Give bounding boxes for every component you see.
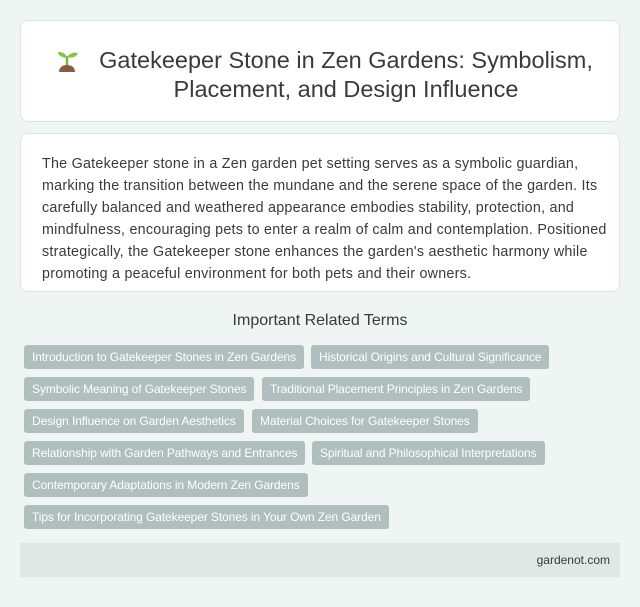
title: Gatekeeper Stone in Zen Gardens: Symbolism, Placement, and Design Influence <box>99 47 593 102</box>
tag: Symbolic Meaning of Gatekeeper Stones <box>32 382 246 396</box>
tag <box>24 505 389 529</box>
description text: mindfulness, encouraging pets to enter a realm of calm and contemplation. Positioned <box>42 222 607 238</box>
tag <box>262 377 530 401</box>
description text: marking the transition between the mundane and the serene space of the garden. Its <box>42 178 597 194</box>
tag <box>24 377 254 401</box>
tag: Historical Origins and Cultural Significance <box>319 350 541 364</box>
tag <box>24 345 304 369</box>
footer credit: gardenot.com <box>537 553 610 567</box>
description text: promoting a peaceful environment for both pets and their owners. <box>42 266 471 282</box>
tag: Spiritual and Philosophical Interpretations <box>320 446 536 460</box>
description panel <box>20 133 620 292</box>
tag: Tips for Incorporating Gatekeeper Stones in Your Own Zen Garden <box>32 510 381 524</box>
tag: Traditional Placement Principles in Zen Gardens <box>270 382 522 396</box>
tag: Design Influence on Garden Aesthetics <box>32 414 236 428</box>
tag <box>312 441 544 465</box>
tag <box>24 409 244 433</box>
description text: The Gatekeeper stone in a Zen garden pet setting serves as a symbolic guardian, <box>42 156 578 172</box>
tag: Material Choices for Gatekeeper Stones <box>260 414 470 428</box>
tag <box>24 441 305 465</box>
tag <box>24 473 308 497</box>
heading: related terms: Important Related Terms <box>233 312 407 329</box>
title card <box>20 20 620 122</box>
tag: Relationship with Garden Pathways and Entrances <box>32 446 297 460</box>
icon: sprout <box>58 52 78 72</box>
tag <box>252 409 478 433</box>
tag: Contemporary Adaptations in Modern Zen Gardens <box>32 478 300 492</box>
tag <box>311 345 549 369</box>
description text: strategically, the Gatekeeper stone enhances the garden's aesthetic harmony while <box>42 244 588 260</box>
tag: Introduction to Gatekeeper Stones in Zen Gardens <box>32 350 296 364</box>
description text: carefully balanced and weathered appearance embodies stability, protection, and <box>42 200 574 216</box>
footer <box>20 543 620 577</box>
description text <box>42 156 607 282</box>
